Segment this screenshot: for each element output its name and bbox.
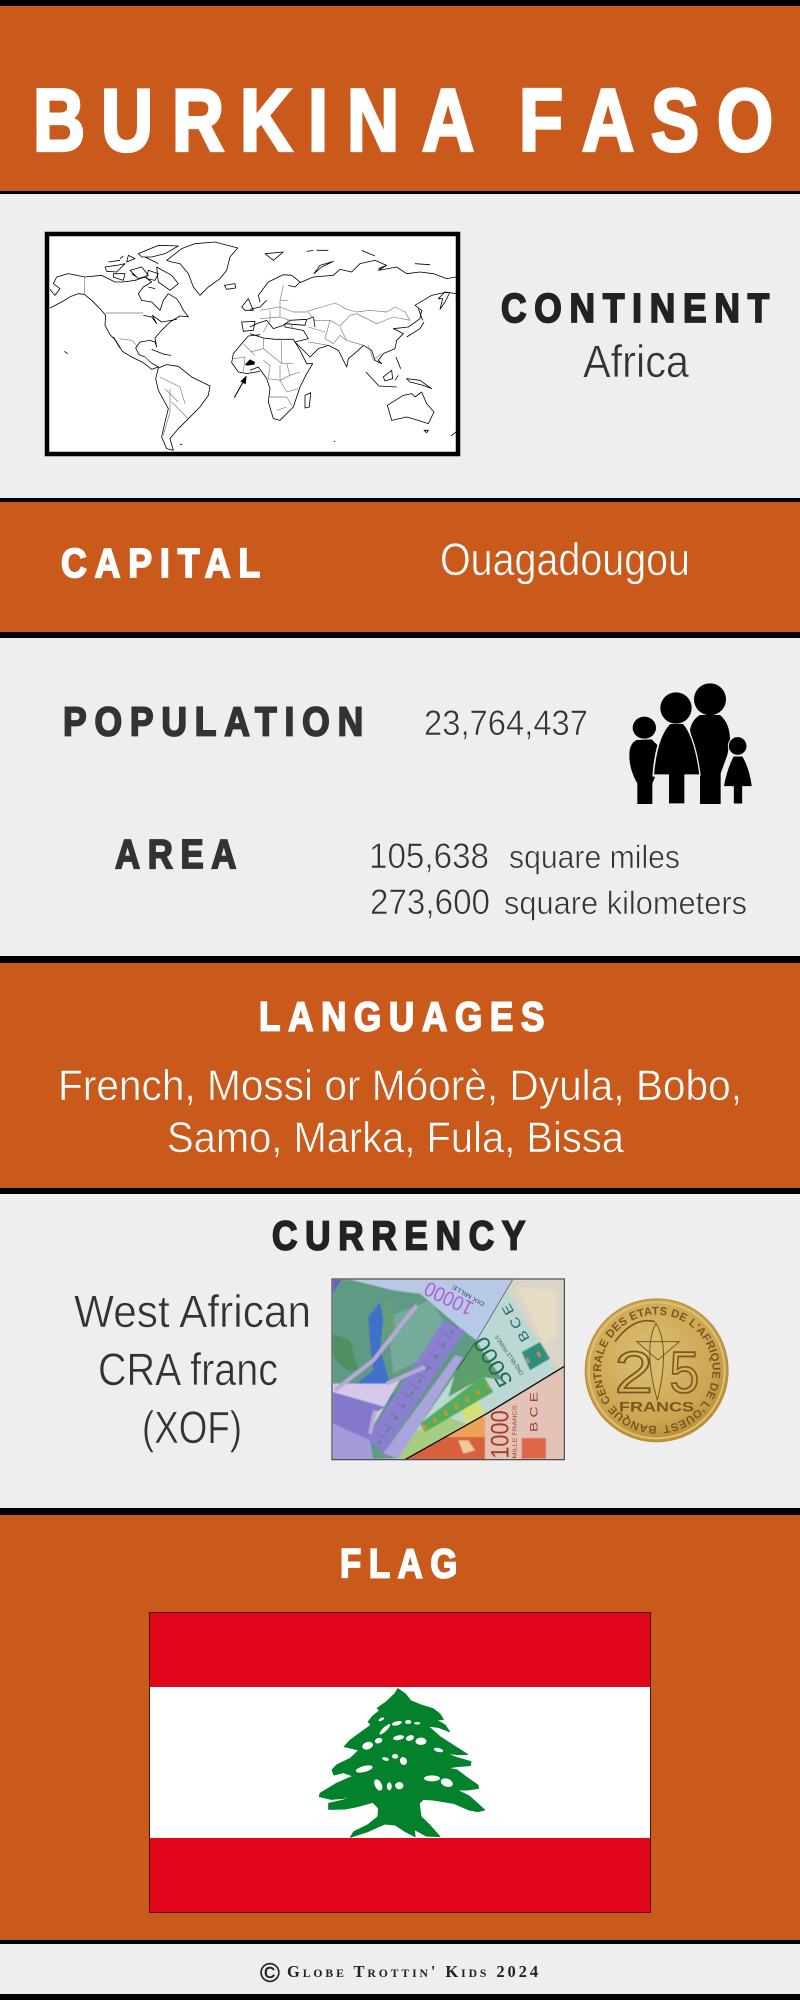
image: 25 francs coin: 5 xyxy=(669,1341,699,1406)
currency name: CRA franc xyxy=(98,1344,278,1395)
capital value: Ouagadougou xyxy=(440,534,690,585)
South America xyxy=(156,365,210,450)
Asia and Europe borders xyxy=(260,285,410,360)
map: Africa, Eurasia and Oceania xyxy=(250,250,456,441)
capital heading: CAPITAL xyxy=(61,540,268,586)
area values: 273,600 xyxy=(370,883,490,922)
cedar tree xyxy=(319,1689,485,1837)
note denominations: 10000 xyxy=(421,1277,477,1320)
currency name: (XOF) xyxy=(142,1402,242,1453)
population value: 23,764,437 xyxy=(424,704,588,743)
flag image xyxy=(150,1612,650,1912)
image: banknotes: 5000 xyxy=(468,1332,518,1392)
image: banknotes xyxy=(332,1277,564,1460)
lower-left lavender xyxy=(332,1380,400,1424)
flag heading: FLAG xyxy=(340,1540,465,1586)
icon: copyright symbol: © xyxy=(260,1958,280,1988)
image: 25 francs coin: FRANCS xyxy=(619,1398,694,1414)
currency heading: CURRENCY xyxy=(272,1212,533,1258)
title: BURKINA FASO xyxy=(33,72,773,170)
image: banknotes: B C E xyxy=(499,1301,533,1345)
currency name xyxy=(74,1286,311,1453)
languages list xyxy=(58,1062,742,1162)
panel: title banner xyxy=(0,0,800,194)
area values xyxy=(369,837,747,922)
image: banknotes: 1000 xyxy=(486,1410,514,1459)
languages list: Samo, Marka, Fula, Bissa xyxy=(167,1114,624,1162)
cream background note xyxy=(374,1280,564,1459)
Africa xyxy=(250,334,313,420)
languages heading: LANGUAGES xyxy=(259,994,552,1040)
panel: capital xyxy=(0,498,800,638)
currency name: West African xyxy=(74,1286,311,1337)
5000 note xyxy=(397,1290,557,1460)
world map with arrow xyxy=(47,234,458,454)
Eurasia coast xyxy=(250,260,456,367)
panel: currency xyxy=(74,1212,729,1460)
Australia xyxy=(387,392,434,424)
image: banknotes: CINQ MILLE FRANCS xyxy=(494,1334,526,1376)
area heading: AREA xyxy=(115,831,244,877)
footer xyxy=(0,1958,800,2000)
area values: square miles xyxy=(509,839,680,875)
image: 25 francs coin: BANQUE CENTRALE DES ETATS DE L'AFRIQUE DE L'OUEST xyxy=(593,1306,720,1434)
footer credit: Globe Trottin' Kids 2024 xyxy=(287,1962,541,1981)
Greenland xyxy=(167,242,238,295)
lavender and purple strips xyxy=(383,1355,463,1459)
area values: 105,638 xyxy=(369,837,489,876)
image: banknotes: B C E xyxy=(528,1392,540,1432)
area values: square kilometers xyxy=(504,885,747,921)
panel: flag xyxy=(0,1508,800,1944)
languages list: French, Mossi or Móorè, Dyula, Bobo, xyxy=(58,1062,742,1110)
continent value: Africa xyxy=(583,336,690,387)
panel: languages xyxy=(0,956,800,1194)
image: banknotes: MILLE FRANCS xyxy=(513,1405,519,1459)
panel: population and area xyxy=(63,683,752,922)
West Africa and Atlantic Europe xyxy=(232,299,260,374)
icon: family xyxy=(629,683,752,804)
10000 note xyxy=(477,1280,513,1324)
1000 note xyxy=(482,1368,564,1459)
panel: continent xyxy=(47,234,777,454)
image: 25 francs coin: 2 xyxy=(615,1341,653,1406)
arrow xyxy=(234,380,244,398)
highlighted country xyxy=(245,359,255,366)
image: banknotes: DIX MILLE xyxy=(451,1283,486,1306)
map: Americas and Atlantic xyxy=(50,242,260,450)
population heading: POPULATION xyxy=(63,698,371,744)
